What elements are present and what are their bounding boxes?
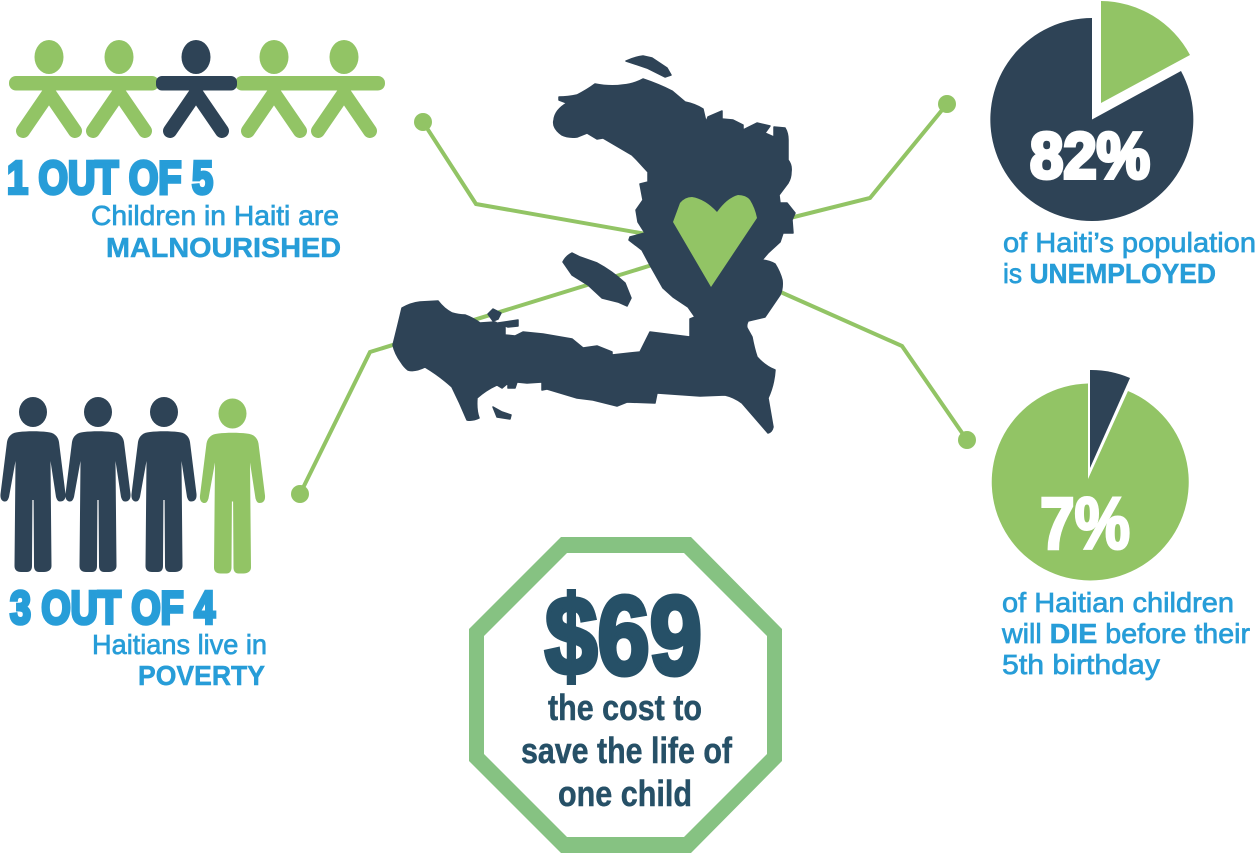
text: child mortality: of Haitian children <box>1002 587 1234 618</box>
text: unemployment <box>1003 227 1256 289</box>
connector: unemployed to map <box>790 95 956 218</box>
text: unemployment: of Haiti’s population <box>1003 227 1256 258</box>
text: haitians in poverty: POVERTY <box>138 660 265 691</box>
pie value: 7%: 7% <box>1040 484 1130 564</box>
text: child mortality: 5th birthday <box>1002 649 1160 680</box>
text: child mortality: will DIE before their <box>1001 618 1250 649</box>
text: children malnourished <box>91 200 341 263</box>
icon: five children holding hands <box>9 40 385 131</box>
connector: child mortality to map <box>776 290 976 449</box>
text: children malnourished: MALNOURISHED <box>106 232 341 263</box>
text: children malnourished: Children in Haiti are <box>91 200 339 231</box>
text: haitians in poverty: Haitians live in <box>92 629 267 660</box>
heading: 1 out of 5: 1 OUT OF 5 <box>7 152 213 204</box>
pie value: 82%: 82% <box>1030 119 1150 192</box>
text: unemployment: is UNEMPLOYED <box>1003 258 1216 289</box>
icon: four adults <box>0 397 265 574</box>
pie chart: 7% <box>992 370 1189 580</box>
text: the cost to save the life of one child: the cost to <box>548 687 702 728</box>
value: $69: $69 <box>545 574 702 698</box>
text: the cost to save the life of one child <box>521 687 733 814</box>
text: the cost to save the life of one child: save the life of <box>521 730 733 771</box>
text: haitians in poverty <box>92 629 267 691</box>
map of Haiti <box>393 56 795 433</box>
heading: 3 out of 4: 3 OUT OF 4 <box>10 582 215 634</box>
connector: poverty to map <box>291 265 652 503</box>
icon: heart <box>673 195 757 287</box>
text: the cost to save the life of one child: one child <box>558 773 692 814</box>
pie chart: 82% <box>990 1 1193 221</box>
text: child mortality <box>1001 587 1250 680</box>
octagon badge: cost to save a life <box>469 537 782 853</box>
connector: malnourished to map <box>414 113 646 234</box>
